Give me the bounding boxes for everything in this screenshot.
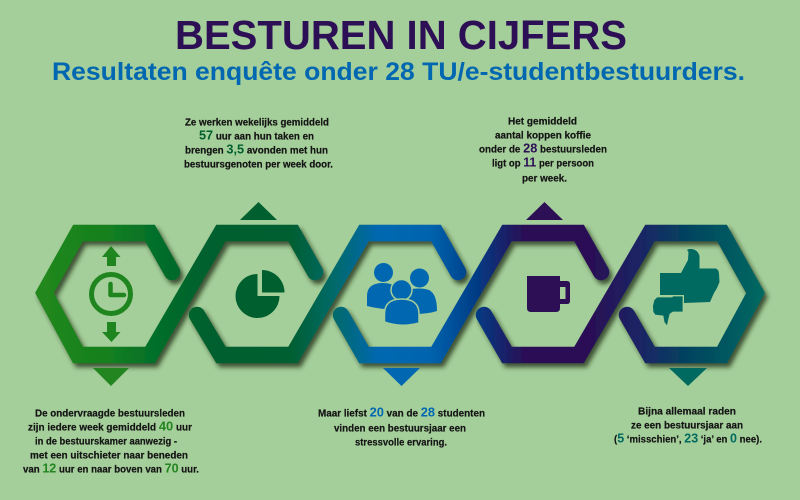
icon: group of people (367, 263, 437, 325)
text block: coffee: Het gemiddeld (508, 116, 577, 128)
icon: clock with up and down arrows (92, 246, 130, 342)
text block: presence: in de bestuurskamer aanwezig - (35, 436, 177, 448)
text block: weekly hours: bestuursgenoten per week door. (184, 160, 333, 170)
text block: coffee: per week. (522, 174, 567, 184)
triangle: down, people (383, 368, 420, 386)
text block: presence: van 12 uur en naar boven van 70 uur. (23, 460, 199, 476)
text block: recommendation: (5 ‘misschien’, 23 ‘ja’ en 0 nee). (614, 430, 762, 446)
icon: thumbs up and down (652, 249, 720, 325)
triangle: up, pie (240, 202, 277, 220)
triangle: up, coffee (526, 202, 563, 220)
icon: coffee mug (527, 276, 570, 312)
text block: presence (23, 408, 199, 476)
text block: stress: Maar liefst 20 van de 28 studenten (318, 404, 485, 420)
text block: coffee (479, 116, 607, 184)
text block: coffee: onder de 28 bestuursleden (479, 140, 607, 156)
hexagon chain (44, 233, 756, 355)
triangle: down, thumbs (669, 368, 707, 386)
text block: stress (318, 404, 485, 448)
text block: stress: vinden een bestuursjaar een (334, 424, 466, 434)
text block: recommendation: Bijna allemaal raden (638, 406, 736, 418)
text block: coffee: ligt op 11 per persoon (492, 154, 594, 170)
text block: weekly hours: brengen 3,5 avonden met hun (185, 142, 328, 156)
text block: weekly hours: 57 uur aan hun taken en (199, 128, 314, 142)
text block: weekly hours: Ze werken wekelijks gemiddeld (185, 118, 329, 128)
text block: presence: zijn iedere week gemiddeld 40 uur (28, 418, 192, 434)
text block: weekly hours (184, 118, 333, 170)
text block: coffee: aantal koppen koffie (495, 130, 591, 142)
text block: stress: stressvolle ervaring. (355, 438, 447, 448)
text block: presence: De ondervraagde bestuursleden (35, 408, 185, 420)
subtitle: Resultaten enquête onder 28 TU/e-studentbestuurders. (52, 58, 745, 86)
triangle: down, clock (93, 368, 129, 386)
text block: recommendation: ze een bestuursjaar aan (631, 420, 743, 432)
text block: presence: met een uitschieter naar beneden (30, 450, 188, 462)
icon: pie chart (236, 270, 284, 318)
text block: recommendation (614, 406, 762, 446)
title: BESTUREN IN CIJFERS (175, 12, 627, 58)
